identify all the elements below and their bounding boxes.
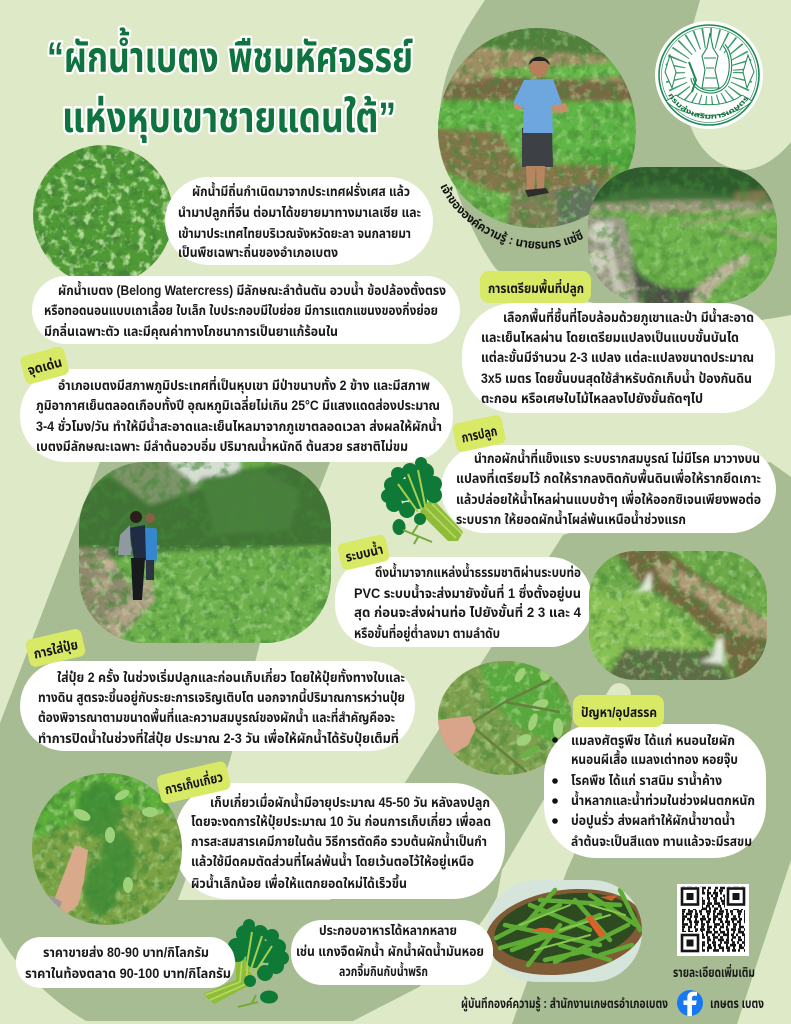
text panel: preparing the planting area: ตะกอน หรือเศษใบไม้ไหลลงไปยังขั้นถัดๆไป xyxy=(481,389,703,406)
tag: problems and obstacles xyxy=(573,695,664,727)
caption: knowledge owner: เจ้าขององค์ความรู้ : นายธนกร แซ่ซี xyxy=(440,184,583,249)
text panel: origin: ผักน้ำมีถิ่นกำเนิดมาจากประเทศฝรั่งเศส แล้ว xyxy=(192,182,410,199)
text panel: preparing the planting area: และเย็นไหลผ่าน โดยเตรียมแปลงเป็นแบบขั้นบันได xyxy=(481,328,739,345)
title: “ผักน้ำเบตง พืชมหัศจรรย์ xyxy=(47,27,413,82)
tag: preparing the planting area: การเตรียมพื้นที่ปลูก xyxy=(488,279,584,298)
photo: man standing in terraced watercress field xyxy=(438,28,636,228)
text panel: harvesting: การสะสมสารเคมีภายในต้น วิธีการตัดคือ รวบต้นผักน้ำเป็นกำ xyxy=(191,832,487,849)
photo: stone weir with flowing water xyxy=(589,551,767,680)
text panel: characteristics: หรือทอดนอนแบบเถาเลื้อย ใบเล็ก ใบประกอบมีใบย่อย มีการแตกแขนงของกิ่งย่อย xyxy=(44,301,438,318)
text panel: preparing the planting area: 3x5 เมตร โดยขั้นบนสุดใช้สำหรับดักเก็บน้ำ ป้องกันดิน xyxy=(481,369,752,387)
text panel: water system xyxy=(335,557,592,647)
text panel: planting: แล้วปล่อยให้น้ำไหลผ่านแบบช้าๆ เพื่อให้ออกซิเจนเพียงพอต่อ xyxy=(456,490,761,507)
icon: watercress bunch xyxy=(203,919,289,1007)
text panel: price: ราคาขายส่ง 80-90 บาท/กิโลกรัม xyxy=(43,944,209,960)
text panel: highlights xyxy=(20,369,453,462)
text panel: preparing the planting area: เลือกพื้นที่ชื้นที่โอบล้อมด้วยภูเขาและป่า มีน้ำสะอาด xyxy=(503,308,754,327)
icon: watercress bunch xyxy=(381,457,463,544)
tag: problems and obstacles: ปัญหา/อุปสรรค xyxy=(581,705,657,721)
icon: facebook xyxy=(677,990,703,1016)
tag: planting xyxy=(452,414,507,453)
text panel: preparing the planting area: แต่ละขั้นมีจำนวน 2-3 แปลง แต่ละแปลงขนาดประมาณ xyxy=(481,348,754,365)
text panel: origin xyxy=(165,177,433,265)
tag: harvesting xyxy=(156,760,231,804)
text panel: characteristics: มีกลิ่นเฉพาะตัว และมีคุณค่าทางโภชนาการเป็นยาแก้ร้อนใน xyxy=(44,323,338,340)
photo: hand holding watercress stem xyxy=(438,661,573,776)
label: more details: รายละเอียดเพิ่มเติม xyxy=(673,964,755,980)
QR code xyxy=(677,884,749,956)
text panel: fertilizing: ทำการปิดน้ำในช่วงที่ใส่ปุ๋ย ประมาณ 2-3 วัน เพื่อให้ผักน้ำได้รับปุ๋ยเต็มที่ xyxy=(38,729,399,747)
text panel: cooking uses: เช่น แกงจืดผักน้ำ ผักน้ำผัดน้ำมันหอย xyxy=(296,942,484,959)
text panel: planting: นำกอผักน้ำที่แข็งแรง ระบบรากสมบูรณ์ ไม่มีโรค มาวางบน xyxy=(474,449,760,468)
text panel: water system: PVC ระบบน้ำจะส่งมายังขั้นที่ 1 ซึ่งตั้งอยู่บน xyxy=(354,584,581,603)
text panel: problems and obstacles: น้ำหลากและน้ำท่วมในช่วงฝนตกหนัก xyxy=(571,791,755,808)
text panel: price xyxy=(16,937,235,988)
text panel: water system: หรือขั้นที่อยู่ต่ำลงมา ตามลำดับ xyxy=(354,624,500,643)
text panel: fertilizing: ทางดิน สูตรจะขึ้นอยู่กับระยะการเจริญเติบโต นอกจากนี้ปริมาณการหว่านปุ๋ย xyxy=(38,688,405,707)
text panel: harvesting: โดยจะงดการให้ปุ๋ยประมาณ 10 วัน ก่อนการเก็บเกี่ยว เพื่อลด xyxy=(191,812,491,830)
text panel: highlights: ภูมิอากาศเย็นตลอดเกือบทั้งปี อุณหภูมิเฉลี่ยไม่เกิน 25°C มีแสงแดดส่องประมาณ xyxy=(36,396,440,415)
tag: water system: ระบบน้ำ xyxy=(344,540,385,565)
text panel: problems and obstacles: ลำต้นจะเป็นสีแดง ทานแล้วจะมีรสขม xyxy=(571,834,752,849)
text panel: highlights: เบตงมีลักษณะเฉพาะ มีลำต้นอวบอิ่ม ปริมาณน้ำหนักดี ต้นสวย รสชาติไม่ขม xyxy=(36,437,408,454)
text panel: harvesting xyxy=(175,783,505,899)
text panel: highlights: อำเภอเบตงมีสภาพภูมิประเทศที่เป็นหุบเขา มีป่าขนาบทั้ง 2 ข้าง และมีสภาพ xyxy=(58,376,430,395)
figure: knowledge owner xyxy=(513,57,569,197)
text panel: preparing the planting area xyxy=(462,303,775,413)
photo: stir-fried watercress dish xyxy=(487,880,642,982)
text panel: fertilizing: ต้องพิจารณาตามขนาดพื้นที่และความสมบูรณ์ของผักน้ำ และที่สำคัญคือจะ xyxy=(38,708,395,727)
tag: planting: การปลูก xyxy=(460,423,499,448)
text panel: problems and obstacles xyxy=(544,724,766,858)
logo: Department of Agricultural Extension seal: กรมส่งเสริมการเกษตร xyxy=(668,94,748,119)
text panel: harvesting: เก็บเกี่ยวเมื่อผักน้ำมีอายุประมาณ 45-50 วัน หลังลงปลูก xyxy=(210,793,490,812)
text panel: harvesting: แล้วใช้มีดคมตัดส่วนที่โผล่พ้นน้ำ โดยเว้นตอไว้ให้อยู่เหนือ xyxy=(191,852,474,871)
tag: fertilizing: การใส่ปุ๋ย xyxy=(32,636,80,663)
photo: valley with two people in the field xyxy=(79,462,331,643)
text panel: cooking uses xyxy=(291,920,493,985)
text panel: planting: ระบบราก ให้ยอดผักน้ำโผล่พ้นเหนือน้ำช่วงแรก xyxy=(456,510,686,527)
text panel: harvesting: ผิวน้ำเล็กน้อย เพื่อให้แตกยอดใหม่ได้เร็วขึ้น xyxy=(191,874,407,891)
text panel: fertilizing: ใส่ปุ๋ย 2 ครั้ง ในช่วงเริ่มปลูกและก่อนเก็บเกี่ยว โดยให้ปุ๋ยทั้งทางใบและ xyxy=(57,668,405,687)
text panel: planting xyxy=(441,445,776,533)
text panel: origin: เป็นพืชเฉพาะถิ่นของอำเภอเบตง xyxy=(178,244,338,260)
text panel: highlights: 3-4 ชั่วโมง/วัน ทำให้มีน้ำสะอาดและเย็นไหลมาจากภูเขาตลอดเวลา ส่งผลให้ผักน้ำ xyxy=(36,417,442,436)
tag: harvesting: การเก็บเกี่ยว xyxy=(163,767,224,797)
credit: knowledge recorder: ผู้บันทึกองค์ความรู้ : สำนักงานเกษตรอำเภอเบตง xyxy=(461,996,668,1013)
text panel: origin: เข้ามาประเทศไทยบริเวณจังหวัดยะลา จนกลายมา xyxy=(178,226,411,241)
photo: terraced plots with stone channel xyxy=(588,167,777,303)
text panel: cooking uses: ประกอบอาหารได้หลากหลาย xyxy=(319,923,457,938)
text panel: problems and obstacles: หนอนผีเสื้อ แมลงเต่าทอง หอยจุ๊บ xyxy=(571,750,738,768)
text panel: origin: นำมาปลูกที่จีน ต่อมาได้ขยายมาทางมาเลเซีย และ xyxy=(178,203,421,222)
text panel: water system: ดึงน้ำมาจากแหล่งน้ำธรรมชาติผ่านระบบท่อ xyxy=(375,563,581,580)
tag: fertilizing xyxy=(25,628,86,668)
photo: hand holding harvested bunch xyxy=(32,773,182,925)
tag: highlights: จุดเด่น xyxy=(26,354,64,379)
text panel: water system: สุด ก่อนจะส่งผ่านท่อ ไปยังขั้นที่ 2 3 และ 4 xyxy=(354,603,581,621)
text panel: characteristics: ผักน้ำเบตง (Belong Watercress) มีลักษณะลำต้นตัน อวบน้ำ ข้อปล้องตั้งตรง xyxy=(58,281,446,298)
text panel: problems and obstacles: แมลงศัตรูพืช ได้แก่ หนอนใยผัก xyxy=(571,732,735,750)
text panel: price: ราคาในท้องตลาด 90-100 บาท/กิโลกรัม xyxy=(25,966,231,981)
photo: watercress close-up circle xyxy=(33,145,173,285)
tag: water system xyxy=(337,534,391,571)
text panel: cooking uses: ลวกจิ้มกินกับน้ำพริก xyxy=(339,962,428,979)
text panel: characteristics xyxy=(32,276,460,344)
text panel: problems and obstacles: โรคพืช ได้แก่ ราสนิม ราน้ำค้าง xyxy=(571,771,722,788)
tag: preparing the planting area xyxy=(480,271,591,303)
label: facebook page name: เกษตร เบตง xyxy=(710,996,764,1011)
text panel: problems and obstacles: บ่อปูนรั่ว ส่งผลทำให้ผักน้ำขาดน้ำ xyxy=(571,811,735,830)
text panel: fertilizing xyxy=(20,661,415,751)
logo: Department of Agricultural Extension seal xyxy=(655,21,763,129)
tag: highlights xyxy=(19,346,70,385)
text panel: planting: แปลงที่เตรียมไว้ กดให้รากลงติดกับพื้นดินเพื่อให้รากยึดเกาะ xyxy=(456,469,761,486)
figure: two people xyxy=(118,511,157,600)
title: แห่งหุบเขาชายแดนใต้” xyxy=(62,94,396,143)
title xyxy=(47,27,413,143)
